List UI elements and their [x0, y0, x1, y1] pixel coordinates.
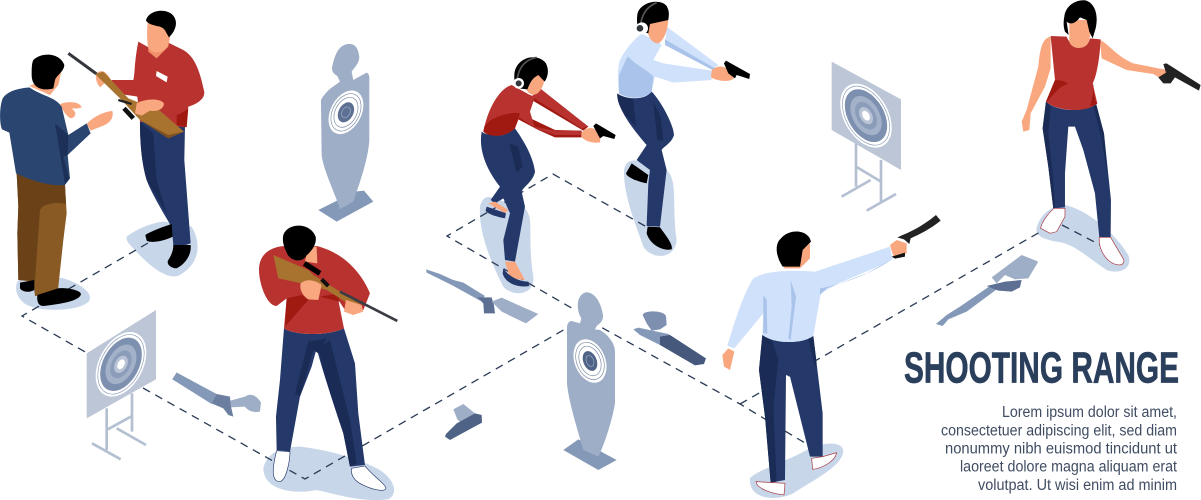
rifle held by instructor: [68, 53, 184, 138]
target: silhouette rear: [318, 44, 373, 222]
person: man in navy sweater: [0, 55, 113, 306]
text block: description: [941, 404, 1178, 494]
person: woman in sleeveless red top: [1022, 0, 1201, 265]
icon: grey target pistol left: [172, 373, 261, 417]
person: rifleman in red centre-left: [259, 226, 397, 490]
text block: description: Lorem ipsum dolor sit amet,: [1002, 404, 1177, 421]
text block: description: volutpat. Ut wisi enim ad minim: [978, 477, 1177, 494]
text block: description: laoreet dolore magna aliquam erat: [960, 458, 1178, 476]
person: instructor in red with rifle: [68, 11, 204, 268]
text block: description: consectetuer adipiscing elit, sed diam: [941, 422, 1177, 440]
icon: grey scoped rifle centre: [426, 269, 538, 323]
icon: grey scoped rifle right: [936, 255, 1038, 326]
icon: grey compact pistol: [445, 404, 482, 440]
person: man in light shirt with earmuffs: [617, 2, 750, 250]
rifle aimed by rifleman: [273, 255, 397, 321]
person: woman in red with earmuffs: [481, 57, 616, 287]
dashed floor path: [22, 174, 1104, 479]
target: paper board left: [85, 310, 157, 459]
target: paper board right: [830, 62, 902, 211]
floor shadows: [16, 161, 1129, 500]
icon: grey target pistol centre: [633, 311, 706, 365]
text block: description: nonummy nibh euismod tincidunt ut: [945, 440, 1178, 458]
person: man in light shirt aiming pistol, back view: [722, 215, 941, 495]
target: silhouette centre: [563, 292, 617, 470]
